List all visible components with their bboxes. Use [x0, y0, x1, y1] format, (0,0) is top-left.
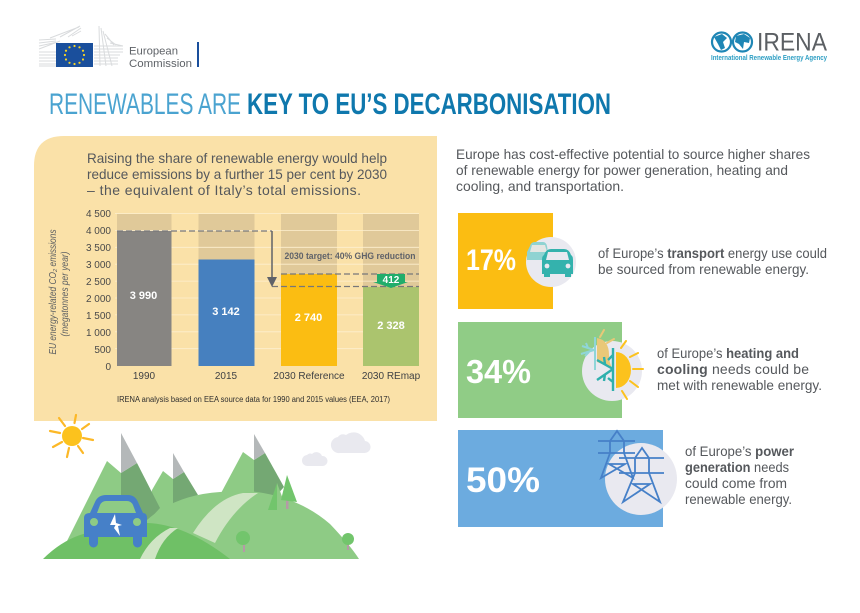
front hill [43, 523, 230, 559]
y axis tick labels: 2 000 [86, 294, 111, 305]
bar: 2030 Reference: 2 740 [295, 312, 322, 324]
bar: 1990 [117, 231, 172, 366]
logo: IRENA: International Renewable Energy Agency [711, 55, 827, 62]
y axis tick labels: 0 [105, 362, 111, 373]
y axis title: (megatonnes per year) [60, 252, 71, 336]
bar: 2030 REmap: 2 328 [377, 320, 405, 332]
right intro text [456, 146, 810, 194]
logo: European Commission: Commission [129, 58, 192, 70]
card: heating and cooling 34%: 34% [466, 353, 531, 390]
y axis title [48, 230, 71, 354]
y axis tick labels: 2 500 [86, 277, 111, 288]
panel intro text: Raising the share of renewable energy would help [87, 150, 387, 166]
card: heating and cooling 34% [458, 322, 822, 418]
panel intro text [87, 150, 387, 198]
illustration: landscape [43, 415, 371, 559]
y axis tick labels: 4 500 [86, 209, 111, 220]
clouds [302, 432, 371, 466]
chart background columns [117, 214, 419, 366]
text: of Europe’s power [685, 443, 795, 459]
y axis title: EU energy-related CO₂ emissions [48, 230, 59, 354]
target label: 2030 target: 40% GHG reduction [284, 251, 416, 261]
text: renewable energy. [685, 491, 792, 507]
icon: sun [50, 415, 93, 457]
y axis tick labels: 4 000 [86, 226, 111, 237]
panel intro text: reduce emissions by a further 15 per cent by 2030 [87, 166, 387, 182]
bar chart [48, 209, 421, 404]
right intro text: Europe has cost-effective potential to source higher shares [456, 146, 810, 162]
card: transport 17%: 17% [466, 244, 516, 277]
x axis labels: 2015 [215, 371, 238, 382]
text: of Europe’s heating and [657, 345, 799, 361]
logo: IRENA [711, 28, 827, 62]
logo: IRENA: IRENA [757, 28, 827, 56]
text: of Europe’s transport energy use could [598, 245, 827, 261]
logo: European Commission [39, 26, 199, 70]
text [685, 443, 795, 507]
title [49, 88, 611, 121]
bar: 2015 [198, 260, 254, 366]
road near [140, 528, 178, 559]
text: generation needs [685, 459, 789, 475]
logo: European Commission: European [129, 46, 178, 58]
title: RENEWABLES ARE [49, 88, 241, 121]
right intro text: of renewable energy for power generation, heating and [456, 162, 788, 178]
road far [193, 493, 258, 543]
icon: pylons [598, 431, 664, 502]
y axis tick labels: 1 500 [86, 311, 111, 322]
panel: emissions chart background [34, 136, 437, 421]
text: could come from [685, 475, 787, 491]
bar: 1990: 3 990 [130, 290, 157, 302]
text [598, 245, 827, 277]
icon: sun and snowflake [581, 330, 643, 399]
title: KEY TO EU’S DECARBONISATION [247, 88, 611, 121]
bar: 2015: 3 142 [212, 306, 240, 318]
panel intro text: – the equivalent of Italy’s total emissions. [87, 182, 361, 198]
y axis tick labels: 3 500 [86, 243, 111, 254]
y axis tick labels: 3 000 [86, 260, 111, 271]
y axis tick labels: 500 [94, 345, 111, 356]
x axis labels [133, 371, 421, 382]
card: power generation 50% [458, 430, 795, 527]
text: be sourced from renewable energy. [598, 261, 809, 277]
y axis tick labels: 1 000 [86, 328, 111, 339]
icon: cars [527, 242, 573, 277]
text: met with renewable energy. [657, 377, 822, 393]
arrow: 412 reduction: 412 [383, 275, 400, 286]
x axis labels: 2030 Reference [273, 371, 345, 382]
text [657, 345, 822, 393]
trees [236, 475, 354, 552]
hills [147, 491, 359, 559]
bar: 2030 REmap [363, 287, 419, 366]
bar: 2030 Reference [281, 274, 337, 366]
card: power generation 50%: 50% [466, 461, 540, 500]
icon: electric car [84, 495, 147, 548]
y axis tick labels [86, 209, 111, 373]
right intro text: cooling, and transportation. [456, 178, 624, 194]
source note: IRENA analysis based on EEA source data for 1990 and 2015 values (EEA, 2017) [117, 395, 390, 404]
mountains [65, 433, 284, 545]
dashed target lines [117, 231, 419, 286]
x axis labels: 1990 [133, 371, 156, 382]
x axis labels: 2030 REmap [362, 371, 421, 382]
arrow: target reduction [267, 231, 277, 287]
arrow: 412 reduction [373, 274, 408, 288]
text: cooling needs could be [657, 361, 809, 377]
card: transport 17% [458, 213, 827, 309]
